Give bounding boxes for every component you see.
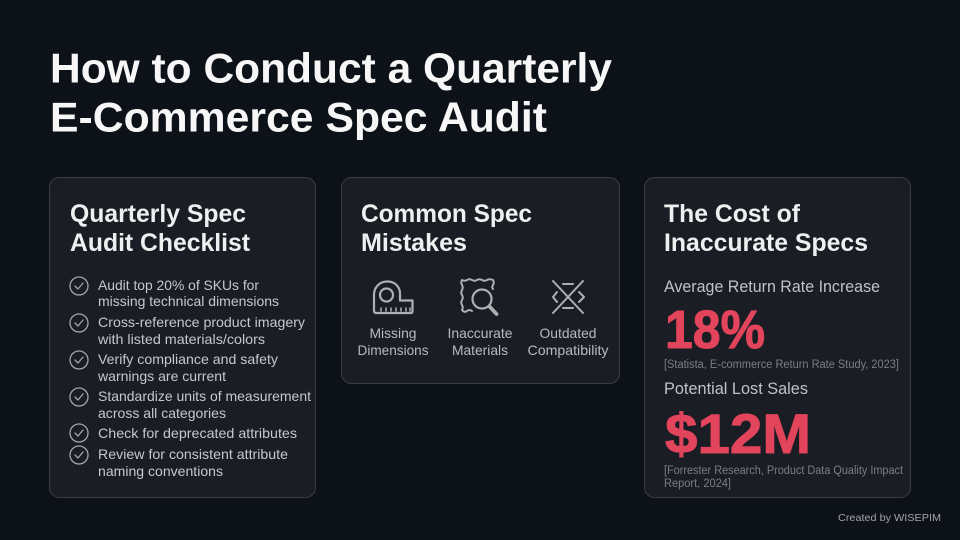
checklist item 3: Verify compliance and safety xyxy=(98,351,278,367)
label: outdated compatibility xyxy=(528,325,608,358)
stat: lost sales: [Forrester Research, Product Data Quality Impact xyxy=(664,465,904,477)
label: inaccurate materials xyxy=(448,325,513,358)
title xyxy=(50,44,613,140)
stat: lost sales xyxy=(664,380,904,490)
heading: mistakes: Mistakes xyxy=(361,229,467,257)
checklist item 4 xyxy=(70,388,311,421)
stat: return rate xyxy=(664,278,899,371)
checklist item 1 xyxy=(70,277,279,309)
heading: cost: The Cost of xyxy=(664,200,801,228)
label: missing dimensions: Dimensions xyxy=(358,342,428,358)
icon: material magnifier xyxy=(461,279,496,314)
stat: return rate: 18% xyxy=(665,300,765,360)
heading: cost xyxy=(664,200,868,257)
checklist item 2: with listed materials/colors xyxy=(97,331,265,347)
checklist item 6: Review for consistent attribute xyxy=(98,446,288,462)
heading: checklist: Quarterly Spec xyxy=(70,200,246,228)
heading: checklist: Audit Checklist xyxy=(70,229,251,257)
checklist item 4: across all categories xyxy=(98,405,226,421)
label: missing dimensions: Missing xyxy=(370,325,416,341)
panel: checklist xyxy=(50,178,316,498)
heading: mistakes xyxy=(361,200,532,257)
title: How to Conduct a Quarterly xyxy=(50,44,613,92)
checklist item 1: Audit top 20% of SKUs for xyxy=(98,277,259,293)
stat: lost sales: Report, 2024] xyxy=(664,478,731,490)
checklist item 2: Cross-reference product imagery xyxy=(98,314,305,330)
checklist item 4: Standardize units of measurement xyxy=(98,388,311,404)
label: missing dimensions xyxy=(358,325,428,358)
stat: return rate: [Statista, E-commerce Return Rate Study, 2023] xyxy=(664,359,899,371)
checklist item 3 xyxy=(70,351,278,384)
heading: checklist xyxy=(70,200,251,257)
label: outdated compatibility: Outdated xyxy=(540,325,596,341)
panel: cost xyxy=(644,178,910,498)
icon: outdated compatibility xyxy=(553,281,584,313)
panel: common mistakes xyxy=(342,178,620,384)
label: inaccurate materials: Materials xyxy=(452,342,508,358)
checklist item 5: Check for deprecated attributes xyxy=(98,425,297,441)
heading: cost: Inaccurate Specs xyxy=(664,229,868,257)
stat: return rate: Average Return Rate Increase xyxy=(664,278,880,296)
checklist item 1: missing technical dimensions xyxy=(98,293,279,309)
checklist item 6 xyxy=(70,446,288,479)
heading: mistakes: Common Spec xyxy=(361,200,532,228)
checklist item 3: warnings are current xyxy=(97,368,226,384)
label: outdated compatibility: Compatibility xyxy=(528,342,608,358)
credit: Created by WISEPIM xyxy=(838,512,941,524)
title: E-Commerce Spec Audit xyxy=(50,94,547,140)
checklist item 6: naming conventions xyxy=(98,463,223,479)
icon: tape measure xyxy=(374,282,412,313)
stat: lost sales: $12M xyxy=(665,402,811,465)
checklist item 2 xyxy=(70,314,305,347)
stat: lost sales: Potential Lost Sales xyxy=(664,380,808,398)
label: inaccurate materials: Inaccurate xyxy=(448,325,513,341)
